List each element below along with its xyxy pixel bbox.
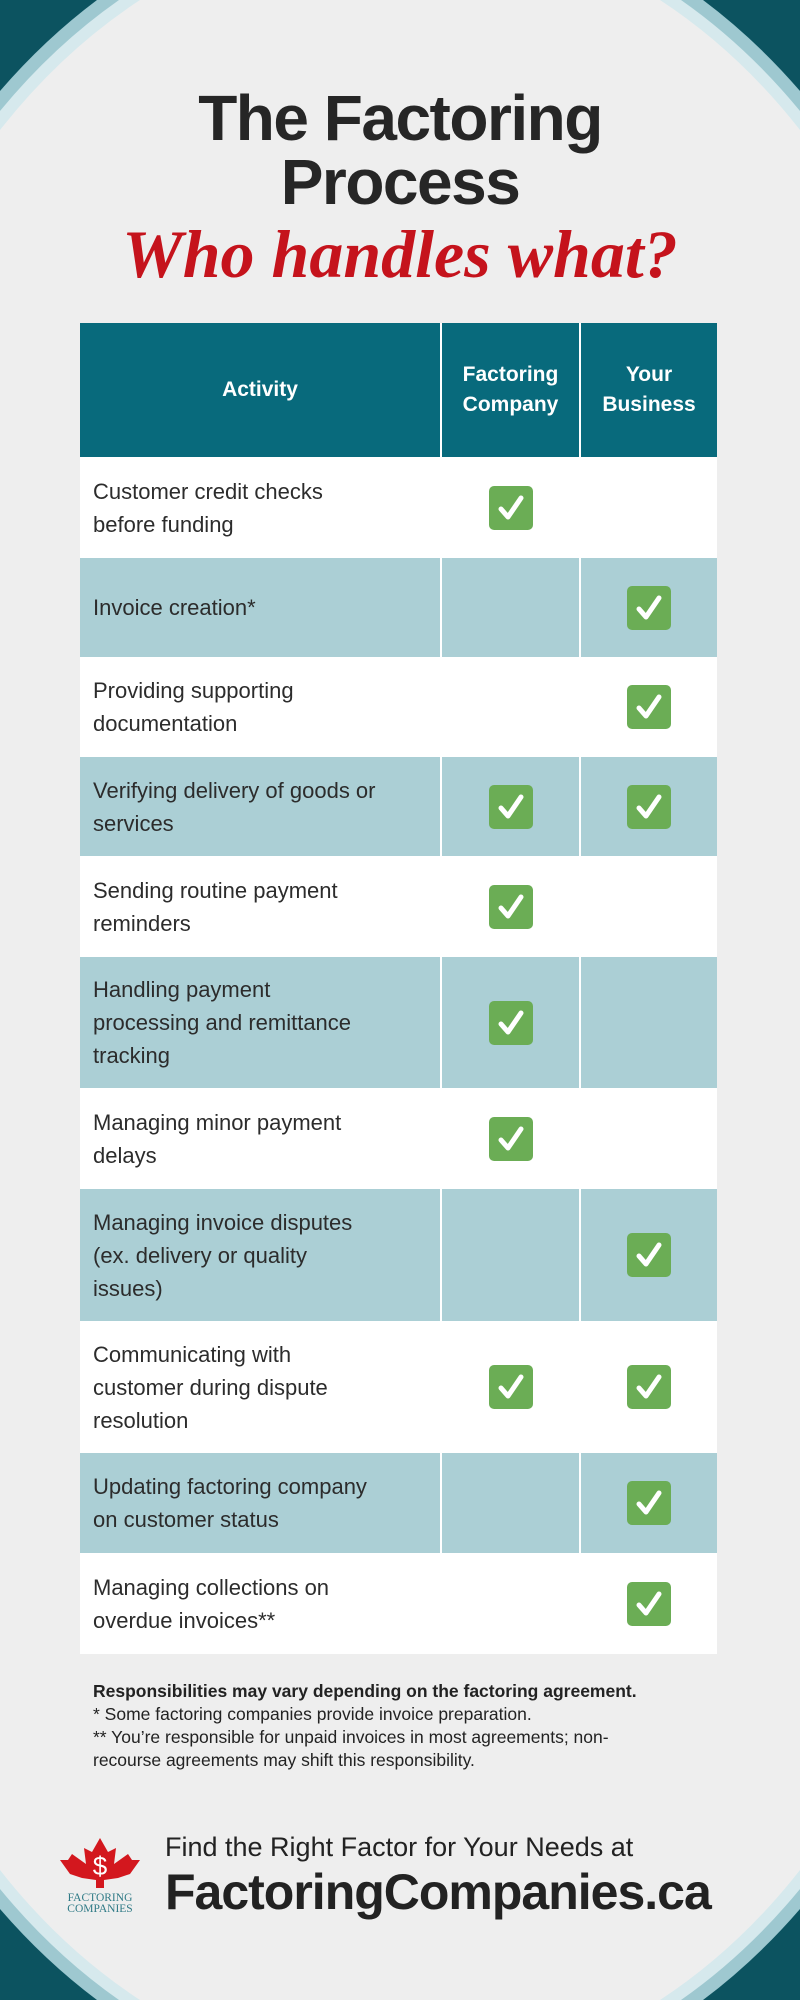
table header: Business [602, 393, 696, 416]
row 10 [80, 1453, 717, 1553]
row 3 [80, 657, 717, 757]
footnotes: recourse agreements may shift this responsibility. [93, 1750, 475, 1770]
title: The Factoring [198, 82, 602, 154]
row 7: Managing minor payment [93, 1110, 341, 1134]
row 8: (ex. delivery or quality [93, 1242, 307, 1268]
footnotes [93, 1681, 637, 1770]
logo: $ [93, 1851, 108, 1881]
footnotes: * Some factoring companies provide invoice preparation. [93, 1704, 532, 1724]
row 8: Managing invoice disputes [93, 1210, 352, 1234]
row 9 [80, 1321, 717, 1453]
footnotes: Responsibilities may vary depending on the factoring agreement. [93, 1681, 637, 1701]
row 7: delays [93, 1142, 157, 1168]
footnotes: ** You’re responsible for unpaid invoices in most agreements; non- [93, 1727, 609, 1747]
row 6: processing and remittance [93, 1010, 351, 1035]
table header [80, 323, 717, 457]
row 5: reminders [93, 910, 191, 936]
row 8 [80, 1189, 717, 1321]
subtitle script: Who handles what? [122, 216, 678, 292]
row 4: services [93, 810, 174, 836]
row 10: Updating factoring company [93, 1474, 367, 1499]
logo [60, 1838, 140, 1915]
row 3: Providing supporting [93, 678, 294, 703]
row 1: before funding [93, 512, 234, 536]
footer call to action: FactoringCompanies.ca [165, 1864, 711, 1920]
row 6: Handling payment [93, 977, 270, 1002]
row 5: Sending routine payment [93, 878, 338, 902]
row 3: documentation [93, 711, 237, 736]
row 11 [80, 1553, 717, 1654]
row 1 [80, 457, 717, 558]
title [198, 82, 602, 218]
table header: Your [626, 363, 672, 386]
row 4 [80, 757, 717, 856]
row 9: Communicating with [93, 1342, 291, 1366]
row 9: resolution [93, 1408, 188, 1432]
row 5 [80, 856, 717, 957]
row 1: Customer credit checks [93, 478, 323, 504]
row 7 [80, 1088, 717, 1189]
row 11: overdue invoices** [93, 1608, 275, 1632]
row 2: Invoice creation* [93, 595, 256, 620]
table header: Activity [222, 378, 298, 401]
footer call to action: Find the Right Factor for Your Needs at [165, 1832, 633, 1862]
logo: COMPANIES [67, 1903, 133, 1915]
title: Process [281, 146, 519, 218]
row 2 [80, 558, 717, 657]
row 9: customer during dispute [93, 1374, 328, 1400]
row 4: Verifying delivery of goods or [93, 778, 376, 802]
row 6: tracking [93, 1043, 170, 1068]
logo: FACTORING [68, 1892, 132, 1904]
row 11: Managing collections on [93, 1574, 329, 1600]
table header: Factoring [463, 363, 558, 386]
row 8: issues) [93, 1276, 163, 1300]
table header: Company [463, 393, 558, 416]
table [80, 323, 717, 1654]
row 6 [80, 957, 717, 1088]
footer call to action [165, 1832, 712, 1920]
row 10: on customer status [93, 1507, 279, 1532]
